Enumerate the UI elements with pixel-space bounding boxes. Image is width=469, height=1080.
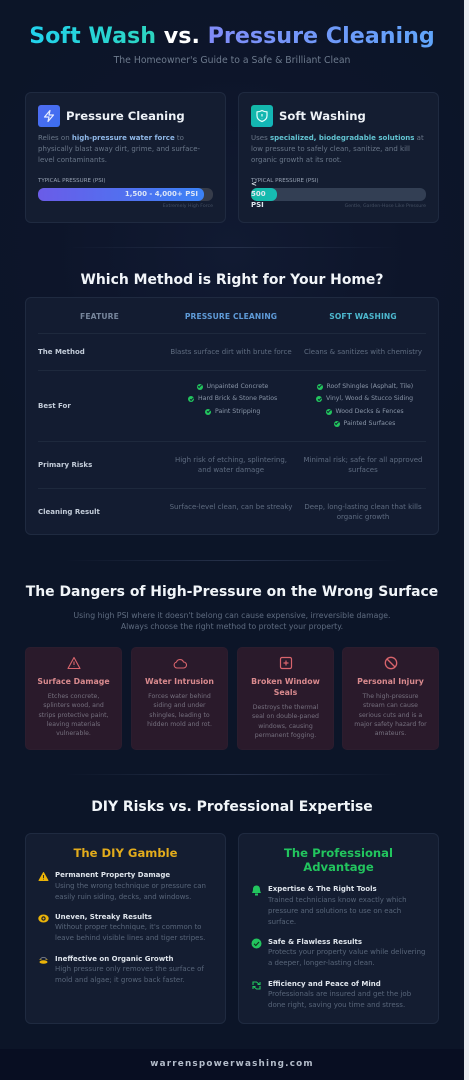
pressure bar	[251, 188, 426, 200]
icon: window square	[280, 656, 292, 670]
description: The high-pressure	[363, 693, 418, 700]
risk: organic growth: mold and algae; it grows back faster.	[55, 976, 185, 984]
row: best for: Hard Brick & Stone Patios	[198, 395, 277, 402]
description: shingles, leading to	[149, 712, 210, 719]
benefit: safe results: Protects your property value while delivering	[268, 948, 426, 956]
panel: broken window seals	[237, 647, 334, 750]
column headers: SOFT WASHING	[329, 312, 397, 320]
heading: diy vs professional: DIY Risks vs. Professional Expertise	[91, 798, 373, 814]
description: siding and under	[153, 702, 206, 709]
description: Forces water behind	[148, 693, 211, 700]
risk: streaky results: Uneven, Streaky Results	[55, 912, 152, 920]
benefit: safe results: a deeper, longer-lasting clean.	[268, 959, 375, 967]
description: strips protective paint,	[38, 712, 109, 719]
description: serious cuts and is a	[359, 712, 422, 719]
footer	[0, 1049, 464, 1080]
row: primary risks	[38, 456, 422, 474]
icon: cloud	[174, 659, 187, 668]
title: Water Intrusion	[145, 677, 214, 686]
panel: comparison table	[25, 297, 439, 535]
title: Surface Damage	[37, 677, 110, 686]
risk: streaky results: Without proper technique, it's common to	[55, 923, 201, 931]
benefit: safe results: Safe & Flawless Results	[268, 938, 362, 946]
row: cleaning result: Cleaning Result	[38, 508, 100, 516]
description: major safety hazard for	[354, 721, 427, 728]
panel heading: The Professional	[284, 846, 393, 860]
benefit: expertise	[252, 885, 407, 926]
row: the method: Cleans & sanitizes with chemistry	[304, 348, 422, 356]
pressure value	[251, 180, 266, 209]
benefit: expertise: Expertise & The Right Tools	[268, 885, 377, 893]
benefit: efficiency	[252, 980, 411, 1009]
pressure value: PSI	[251, 201, 264, 209]
panel: the professional advantage	[238, 833, 439, 1024]
risk: organic growth	[40, 954, 204, 984]
description	[38, 693, 109, 737]
row: primary risks: and water damage	[198, 466, 264, 474]
description: permanent fogging.	[255, 732, 316, 739]
title: Soft Wash vs. Pressure Cleaning	[29, 23, 435, 49]
benefit: expertise: pressure and solutions to use on each	[268, 907, 401, 915]
title: Seals	[274, 688, 297, 697]
subtitle: The Homeowner's Guide to a Safe & Brilliant Clean	[114, 55, 350, 66]
description: windows, causing	[258, 723, 313, 730]
pressure label: TYPICAL PRESSURE (PSI)	[251, 178, 318, 184]
row: primary risks: surfaces	[348, 466, 378, 474]
risk: organic growth: High pressure only removes the surface of	[55, 965, 204, 973]
risk: streaky results	[38, 912, 205, 942]
row: best for: Vinyl, Wood & Stucco Siding	[326, 395, 413, 402]
pressure bar: 1,500 - 4,000+ PSI	[125, 190, 198, 198]
title	[251, 677, 320, 697]
row: the method: Blasts surface dirt with brute force	[170, 348, 292, 356]
risk: property damage: easily ruin siding, decks, and windows.	[55, 893, 191, 901]
icon: bell	[252, 886, 261, 896]
panel: personal injury	[342, 647, 439, 750]
panel: pressure cleaning	[25, 92, 226, 223]
description: Destroys the thermal	[253, 704, 318, 711]
risk: organic growth: Ineffective on Organic Growth	[55, 954, 174, 962]
dangers intro: Always choose the right method to protect your property.	[121, 622, 343, 630]
description: amateurs.	[375, 730, 406, 737]
footer: warrenspowerwashing.com	[150, 1059, 314, 1069]
panel heading	[284, 846, 393, 874]
benefit: expertise: Trained technicians know exactly which	[268, 896, 407, 904]
icon: prohibited	[384, 656, 398, 670]
description: splinters wood, and	[43, 702, 104, 709]
row: the method	[38, 348, 422, 356]
benefit: efficiency: done right, saving you time and stress.	[268, 1001, 405, 1009]
icon: eye	[38, 914, 49, 922]
panel heading: The DIY Gamble	[74, 846, 178, 860]
pressure value: 500	[251, 190, 266, 198]
description: seal on double-paned	[252, 713, 319, 720]
description: physically blast away dirt, grime, and surface-	[38, 145, 200, 153]
icon: warning triangle	[68, 656, 80, 669]
description: hidden mold and rot.	[147, 721, 212, 728]
description: Uses specialized, biodegradable solutions at	[251, 134, 424, 142]
row: cleaning result: organic growth	[337, 513, 389, 521]
row: cleaning result	[38, 502, 422, 521]
row: best for: Paint Stripping	[215, 408, 260, 415]
pressure bar	[38, 188, 213, 200]
panel: the diy gamble	[25, 833, 226, 1024]
row: best for: Painted Surfaces	[344, 420, 395, 427]
row: best for: Best For	[38, 402, 71, 410]
title: Broken Window	[251, 677, 320, 686]
risk: property damage: Permanent Property Damage	[55, 871, 170, 879]
column headers: FEATURE	[80, 312, 119, 320]
icon: refresh arrows	[252, 982, 261, 990]
icon: organic growth	[40, 957, 48, 964]
panel: surface damage	[25, 647, 122, 750]
panel: soft washing	[238, 92, 439, 223]
description: vulnerable.	[56, 730, 91, 737]
icon: shield	[251, 105, 273, 127]
description: leaving materials	[47, 721, 100, 728]
row: primary risks: Minimal risk; safe for all approved	[303, 456, 422, 464]
heading: pressure cleaning: Pressure Cleaning	[66, 109, 185, 123]
benefit: efficiency: Efficiency and Peace of Mind	[268, 980, 381, 988]
bar caption: Gentle, Garden-Hose Like Pressure	[345, 204, 426, 208]
risk: property damage	[38, 871, 206, 901]
pressure label: TYPICAL PRESSURE (PSI)	[38, 178, 105, 184]
benefit: efficiency: Professionals are insured and get the job	[268, 990, 411, 998]
title: Personal Injury	[357, 677, 424, 686]
description: level contaminants.	[38, 156, 107, 164]
icon: warning	[38, 872, 48, 881]
panel heading: Advantage	[303, 860, 374, 874]
dangers intro	[73, 610, 391, 630]
row: best for: Unpainted Concrete	[206, 383, 268, 390]
benefit: expertise: surface.	[268, 918, 296, 926]
description: organic growth at its root.	[251, 156, 342, 164]
icon: check circle	[252, 938, 262, 948]
row: best for	[38, 383, 413, 427]
icon: lightning bolt	[38, 105, 60, 127]
row: the method: The Method	[38, 348, 85, 356]
panel: water intrusion	[131, 647, 228, 750]
description	[38, 134, 200, 164]
description	[252, 704, 319, 739]
bar caption: Extremely High Force	[163, 204, 213, 208]
description	[251, 134, 424, 164]
column headers	[80, 312, 397, 320]
heading: dangers: The Dangers of High-Pressure on the Wrong Surface	[26, 584, 438, 600]
heading: soft washing: Soft Washing	[279, 109, 366, 123]
description	[147, 693, 212, 728]
row: best for: Wood Decks & Fences	[336, 408, 404, 415]
description: stream can cause	[363, 702, 418, 709]
description: low pressure to safely clean, sanitize, and kill	[251, 145, 410, 153]
pressure value: <	[251, 180, 257, 188]
row: primary risks: High risk of etching, splintering,	[175, 456, 287, 464]
row: cleaning result: Deep, long-lasting clean that kills	[304, 502, 422, 510]
risk: property damage: Using the wrong technique or pressure can	[55, 882, 206, 890]
heading: which method: Which Method is Right for Your Home?	[80, 272, 383, 288]
benefit: safe results	[252, 938, 426, 967]
risk: streaky results: leave behind visible lines and tiger stripes.	[55, 934, 205, 942]
row: primary risks: Primary Risks	[38, 461, 92, 469]
column headers: PRESSURE CLEANING	[185, 312, 277, 320]
row: cleaning result: Surface-level clean, can be streaky	[170, 502, 292, 510]
description: Relies on high-pressure water force to	[38, 134, 184, 142]
description: Etches concrete,	[48, 693, 99, 700]
description	[354, 693, 427, 737]
dangers intro: Using high PSI where it doesn't belong can cause expensive, irreversible damage.	[73, 610, 391, 620]
row: best for: Roof Shingles (Asphalt, Tile)	[326, 383, 413, 390]
